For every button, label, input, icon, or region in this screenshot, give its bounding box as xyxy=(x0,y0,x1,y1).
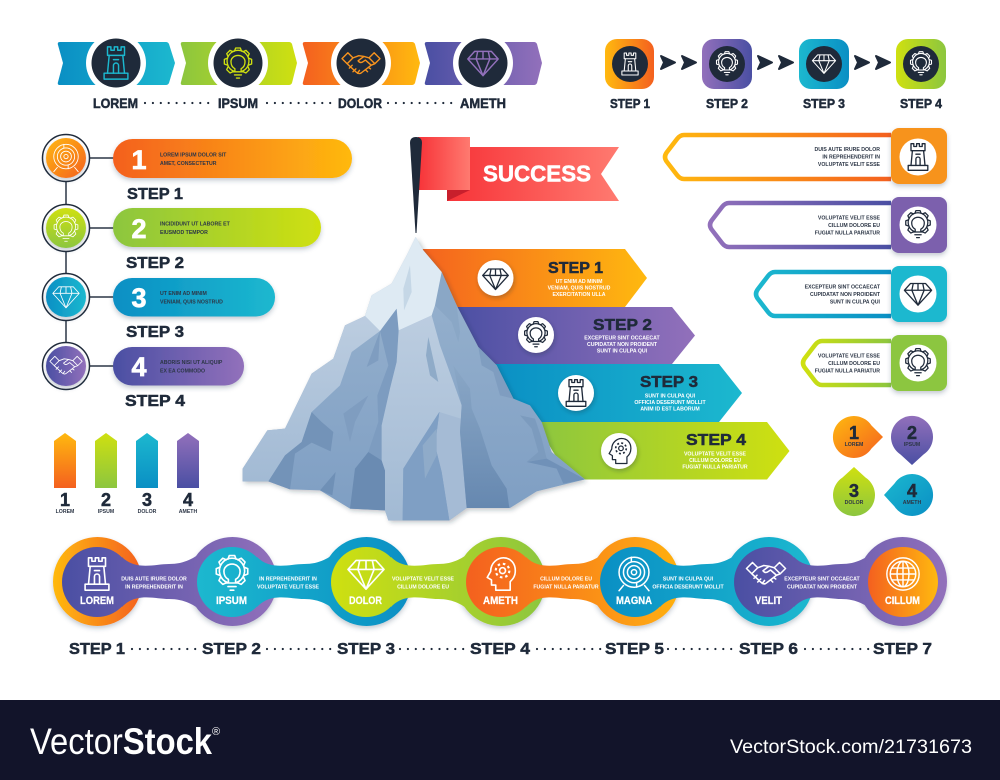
bottom step labels with dotted leaders: STEP 5 xyxy=(605,641,664,658)
segment 5 magna: MAGNA xyxy=(616,595,652,607)
lower left shadow xyxy=(268,412,333,489)
chevron: ameth xyxy=(425,33,542,93)
step 1 row: STEP 1 xyxy=(127,186,183,203)
callout 1 xyxy=(665,128,947,184)
callout 3 xyxy=(756,266,947,322)
step 4 row xyxy=(42,342,244,410)
ribbon step 1: UT ENIM AD MINIM xyxy=(556,279,602,285)
middle lower shadow xyxy=(350,452,385,510)
snow cap xyxy=(365,237,442,331)
right shaded strip xyxy=(453,365,509,508)
panel: left numbered timeline xyxy=(42,134,352,410)
segment 6 velit: VELIT xyxy=(755,595,782,607)
footer bar xyxy=(0,700,1000,780)
ribbon step 1: VENIAM, QUIS NOSTRUD xyxy=(548,286,611,292)
badge 3 xyxy=(833,467,875,516)
tile step 3: STEP 3 xyxy=(803,96,845,111)
badge 4 xyxy=(884,474,933,516)
chevron: ipsum xyxy=(181,33,297,93)
callout 4: VOLUPTATE VELIT ESSE xyxy=(818,354,881,360)
bottom step labels with dotted leaders: STEP 2 xyxy=(202,641,261,658)
ribbon step 2: SUNT IN CULPA QUI xyxy=(597,348,648,354)
segment 6 velit: EXCEPTEUR SINT OCCAECAT xyxy=(784,576,861,582)
registered mark: ® xyxy=(212,726,220,738)
chevron: lorem xyxy=(58,33,175,93)
step 2 row: EIUSMOD TEMPOR xyxy=(160,230,208,236)
step 1 row: 1 xyxy=(131,145,147,175)
panel: numbered badges xyxy=(833,416,933,516)
callout 1: DUIS AUTE IRURE DOLOR xyxy=(814,147,880,153)
segment 6 velit xyxy=(734,537,947,626)
step 2 row: STEP 2 xyxy=(126,255,184,272)
snow shadow xyxy=(403,265,412,310)
tile step 4 xyxy=(896,39,946,111)
badge 4: 4 xyxy=(907,481,917,501)
callout 1: IN REPREHENDERIT IN xyxy=(822,154,880,160)
badge 3: 3 xyxy=(849,481,859,501)
lit lower strip xyxy=(435,412,467,520)
ribbon step 4 xyxy=(535,422,790,480)
step 3 row: 3 xyxy=(131,283,147,313)
tile step 1 xyxy=(605,39,654,111)
badge 1 xyxy=(833,416,883,458)
step 3 row: STEP 3 xyxy=(126,324,184,341)
segment 1 lorem: IN REPREHENDERIT IN xyxy=(125,584,183,590)
step 3 row: UT ENIM AD MINIM xyxy=(160,291,207,297)
segment 2 ipsum xyxy=(197,537,411,626)
callout 3: EXCEPTEUR SINT OCCAECAT xyxy=(805,284,881,290)
top labels with dotted leaders: DOLOR xyxy=(338,95,382,111)
top labels with dotted leaders xyxy=(93,95,506,111)
right ridge patch xyxy=(478,347,513,399)
footer logo: VectorStock xyxy=(30,721,212,762)
banner fold xyxy=(447,190,470,201)
segment 4 ameth: AMETH xyxy=(483,595,518,607)
callout 4: CILLUM DOLORE EU xyxy=(828,361,880,367)
right notch shadow xyxy=(520,415,547,462)
arrows 3 to 4 xyxy=(855,56,890,69)
bar 3: 3 xyxy=(142,490,152,510)
step 2 row: INCIDIDUNT UT LABORE ET xyxy=(160,222,231,228)
mountain illustration xyxy=(243,237,585,520)
step 2 row: 2 xyxy=(131,214,147,244)
bar 1: LOREM xyxy=(56,509,74,515)
segment 3 dolor: CILLUM DOLORE EU xyxy=(397,584,449,590)
segment 6 velit: CUPIDATAT NON PROIDENT xyxy=(787,584,858,590)
segment 5 magna: SUNT IN CULPA QUI xyxy=(663,576,714,582)
badge 4: AMETH xyxy=(903,500,921,506)
bar 2 xyxy=(95,433,117,515)
segment 3 dolor: VOLUPTATE VELIT ESSE xyxy=(392,576,455,582)
chevron: dolor xyxy=(303,33,420,93)
step 1 row: AMET, CONSECTETUR xyxy=(160,161,217,167)
segment 2 ipsum: IPSUM xyxy=(216,595,247,607)
callout 3: SUNT IN CULPA QUI xyxy=(830,300,881,306)
bottom centre blue xyxy=(403,412,449,520)
ribbon step 1 xyxy=(415,249,647,307)
ribbon step 3: SUNT IN CULPA QUI xyxy=(645,394,696,400)
top labels with dotted leaders: IPSUM xyxy=(218,95,258,111)
tile step 4: STEP 4 xyxy=(900,96,943,111)
middle dark strip xyxy=(355,309,399,469)
step 2 row xyxy=(42,204,321,272)
upper right patch xyxy=(435,272,460,342)
tile step 2 xyxy=(702,39,752,111)
ribbon step 3: ANIM ID EST LABORUM xyxy=(640,406,700,412)
badge 2: IPSUM xyxy=(904,442,920,448)
ribbon step 1: EXERCITATION ULLA xyxy=(552,292,606,298)
flag front xyxy=(418,137,470,190)
step 3 row xyxy=(42,274,275,341)
top labels with dotted leaders: AMETH xyxy=(460,95,506,111)
bottom sliver xyxy=(423,429,437,479)
badge 1: LOREM xyxy=(845,442,863,448)
right foot shadow xyxy=(527,459,585,484)
ribbon step 2: EXCEPTEUR SINT OCCAECAT xyxy=(584,336,661,342)
ribbon step 3 xyxy=(490,364,742,422)
callout 3: CUPIDATAT NON PROIDENT xyxy=(810,292,881,298)
tile step 2: STEP 2 xyxy=(706,96,748,111)
ribbon step 4: CILLUM DOLORE EU xyxy=(689,458,741,464)
ribbon step 4: VOLUPTATE VELIT ESSE xyxy=(684,452,747,458)
segment 3 dolor xyxy=(331,537,546,626)
panel: top arrow chevrons xyxy=(58,33,542,111)
bottom step labels with dotted leaders xyxy=(69,641,932,658)
step 4 row: 4 xyxy=(131,352,147,382)
left lit slope xyxy=(243,316,380,481)
badge 1: 1 xyxy=(849,423,859,443)
success heading: SUCCESS xyxy=(483,160,591,186)
callout 2: CILLUM DOLORE EU xyxy=(828,223,880,229)
bar 2: IPSUM xyxy=(98,509,114,515)
segment 5 magna: OFFICIA DESERUNT MOLLIT xyxy=(652,584,724,590)
badge 2 xyxy=(891,416,933,465)
bar 1 xyxy=(54,433,76,515)
arrows 2 to 3 xyxy=(758,56,793,69)
ribbon step 1: STEP 1 xyxy=(548,260,603,277)
step 4 row: STEP 4 xyxy=(125,393,185,410)
upper crevice xyxy=(367,331,380,367)
crevice xyxy=(343,395,368,442)
ribbon step 4: STEP 4 xyxy=(686,432,746,449)
footer url: VectorStock.com/21731673 xyxy=(730,736,972,758)
badge 2: 2 xyxy=(907,423,917,443)
callout 2: VOLUPTATE VELIT ESSE xyxy=(818,216,881,222)
bottom step labels with dotted leaders: STEP 7 xyxy=(873,641,932,658)
bottom step labels with dotted leaders: STEP 6 xyxy=(739,641,798,658)
ribbon step 2: CUPIDATAT NON PROIDENT xyxy=(587,342,658,348)
segment 1 lorem xyxy=(62,537,277,626)
step 4 row: EX EA COMMODO xyxy=(160,368,205,374)
panel: success flag xyxy=(410,137,619,233)
step 1 row xyxy=(42,134,352,203)
segment 1 lorem: LOREM xyxy=(80,595,114,607)
segment 2 ipsum: IN REPREHENDERIT IN xyxy=(259,576,317,582)
step 1 row: LOREM IPSUM DOLOR SIT xyxy=(160,152,227,158)
ribbon step 3: OFFICIA DESERUNT MOLLIT xyxy=(634,400,706,406)
bar 2: 2 xyxy=(101,490,111,510)
step 3 row: VENIAM, QUIS NOSTRUD xyxy=(160,300,223,306)
bar 4 xyxy=(177,433,199,515)
first outer ring xyxy=(53,537,142,626)
segment 2 ipsum: VOLUPTATE VELIT ESSE xyxy=(257,584,320,590)
callout 4 xyxy=(803,335,947,391)
ribbon step 2: STEP 2 xyxy=(593,317,652,334)
callout 2 xyxy=(710,197,947,253)
bar 4: AMETH xyxy=(179,509,197,515)
bottom step labels with dotted leaders: STEP 1 xyxy=(69,641,125,658)
banner xyxy=(447,147,619,201)
segment 3 dolor: DOLOR xyxy=(349,595,382,607)
arrows 1 to 2 xyxy=(661,56,696,69)
badge 3: DOLOR xyxy=(845,500,864,506)
segment 1 lorem: DUIS AUTE IRURE DOLOR xyxy=(121,576,187,582)
mountain silhouette xyxy=(243,237,585,520)
step 4 row: ABORIS NISI UT ALIQUIP xyxy=(160,360,223,366)
top labels with dotted leaders: LOREM xyxy=(93,95,138,111)
bottom step labels with dotted leaders: STEP 3 xyxy=(337,641,395,658)
centre crevice xyxy=(426,337,438,382)
bottom step labels with dotted leaders: STEP 4 xyxy=(470,641,530,658)
segment 4 ameth: CILLUM DOLORE EU xyxy=(540,576,592,582)
panel: bottom seven step chain xyxy=(53,537,947,626)
final circle cillum xyxy=(868,547,938,617)
bar 3 xyxy=(136,433,158,515)
bar 4: 4 xyxy=(183,490,193,510)
ribbon step 2 xyxy=(450,307,695,364)
callout 1: VOLUPTATE VELIT ESSE xyxy=(818,162,881,168)
panel: step ribbons xyxy=(415,249,790,480)
panel: vertical arrow bars xyxy=(54,433,199,515)
ribbon step 3: STEP 3 xyxy=(640,374,698,391)
tile step 3 xyxy=(799,39,849,111)
tile step 1: STEP 1 xyxy=(610,96,650,111)
segment 4 ameth: FUGIAT NULLA PARIATUR xyxy=(533,584,599,590)
small foot shadow xyxy=(320,472,336,495)
segment 5 magna xyxy=(600,537,814,626)
panel: right callouts xyxy=(665,128,947,391)
flag pole xyxy=(410,137,422,233)
final circle cillum: CILLUM xyxy=(885,595,920,607)
callout 4: FUGIAT NULLA PARIATUR xyxy=(815,368,880,374)
panel: top right step tiles xyxy=(605,39,946,111)
ribbon step 4: FUGIAT NULLA PARIATUR xyxy=(682,464,748,470)
centre lit column xyxy=(382,315,462,520)
bar 3: DOLOR xyxy=(138,509,157,515)
segment 4 ameth xyxy=(466,537,680,626)
callout 2: FUGIAT NULLA PARIATUR xyxy=(815,230,880,236)
bar 1: 1 xyxy=(60,490,70,510)
